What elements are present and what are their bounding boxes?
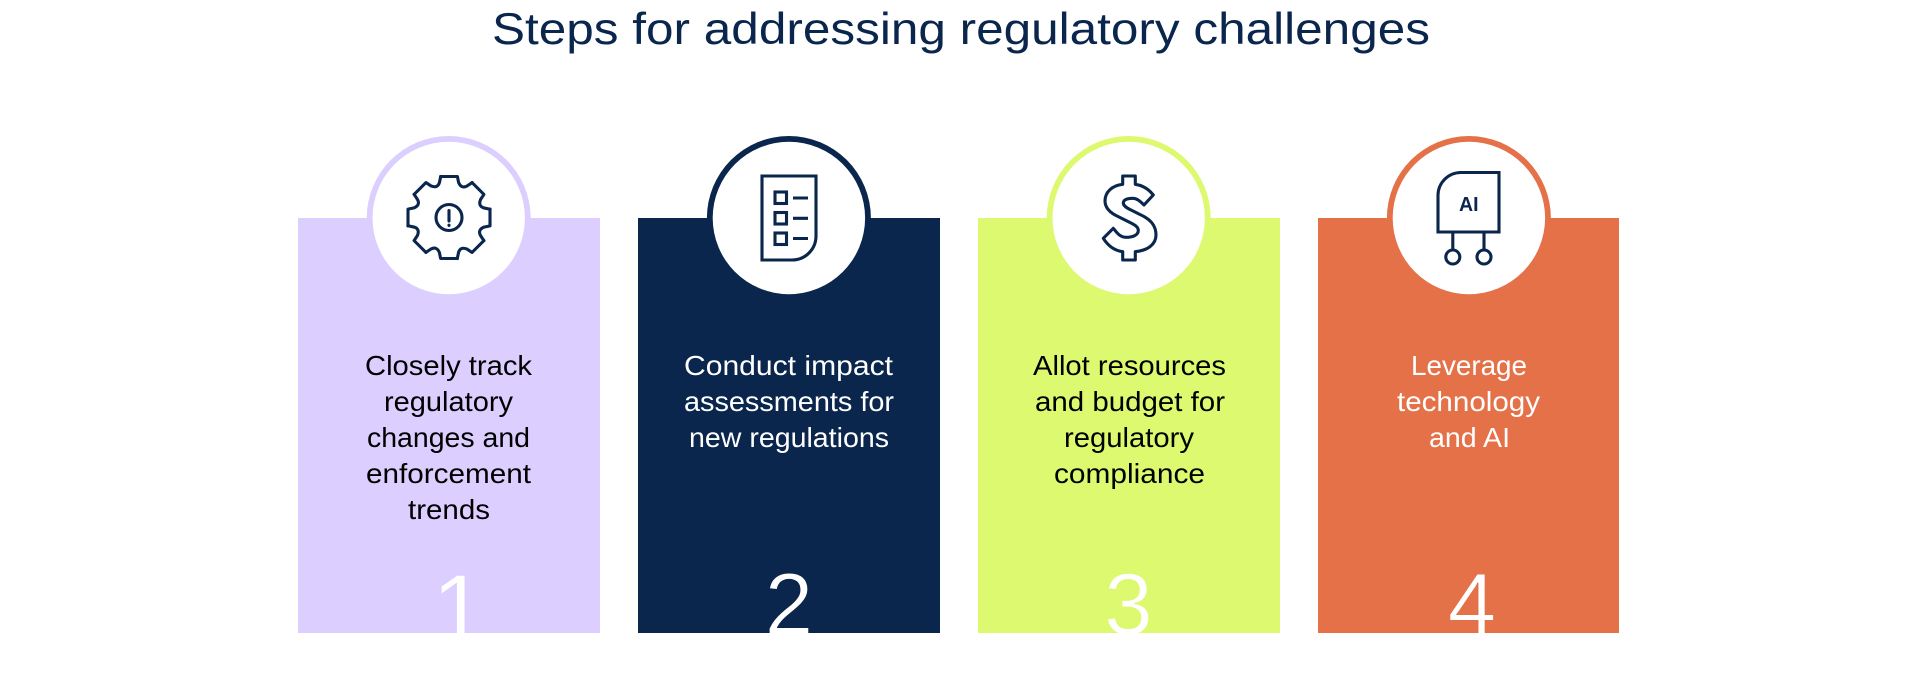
step 4 text [1397, 350, 1540, 453]
step 1 text: trends [408, 494, 490, 525]
step 1 text: regulatory [384, 386, 513, 417]
step number 2: 2 [765, 556, 813, 653]
step 1 text: Closely track [365, 350, 533, 381]
icon disc 1 [372, 142, 525, 294]
step 4 text: Leverage [1411, 350, 1527, 381]
icon: dollar sign [1103, 176, 1156, 260]
step 1 text: changes and [367, 422, 530, 453]
step 2 text [684, 350, 894, 453]
icon ring 1 [367, 136, 531, 300]
icon disc 2 [713, 142, 865, 294]
panel: step 2 [638, 136, 940, 653]
panel: step 4 [1318, 136, 1619, 653]
icon ring 3 [1047, 136, 1211, 300]
step 3 text: Allot resources [1033, 350, 1226, 381]
step 1 text: enforcement [366, 458, 531, 489]
step 3 text: regulatory [1064, 422, 1194, 453]
icon: AI chip: AI [1459, 194, 1478, 216]
card background 4 [1318, 218, 1619, 633]
icon disc 3 [1052, 142, 1205, 294]
step number 4: 4 [1448, 556, 1496, 653]
step 4 text: and AI [1429, 422, 1510, 453]
step 4 text: technology [1397, 386, 1540, 417]
card background 3 [978, 218, 1280, 633]
step number 3: 3 [1104, 556, 1153, 653]
card background 1 [298, 218, 600, 633]
step 3 text [1033, 350, 1226, 489]
step number 1: 1 [432, 554, 486, 664]
card background 2 [638, 218, 940, 633]
step 3 text: and budget for [1035, 386, 1225, 417]
icon: AI chip [1438, 172, 1499, 264]
icon ring 2 [707, 136, 871, 300]
step 2 text: Conduct impact [684, 350, 893, 381]
step 3 text: compliance [1054, 458, 1205, 489]
icon: gear with exclamation mark [404, 172, 494, 263]
icon ring 4 [1387, 136, 1551, 300]
panel: step 3 [978, 136, 1280, 653]
step 1 text [365, 350, 533, 525]
icon: checklist document [762, 176, 816, 260]
step 2 text: assessments for [684, 386, 894, 417]
icon disc 4 [1393, 142, 1545, 294]
title: Steps for addressing regulatory challenges [492, 5, 1430, 54]
step 2 text: new regulations [689, 422, 889, 453]
panel: step 1 [298, 136, 600, 664]
